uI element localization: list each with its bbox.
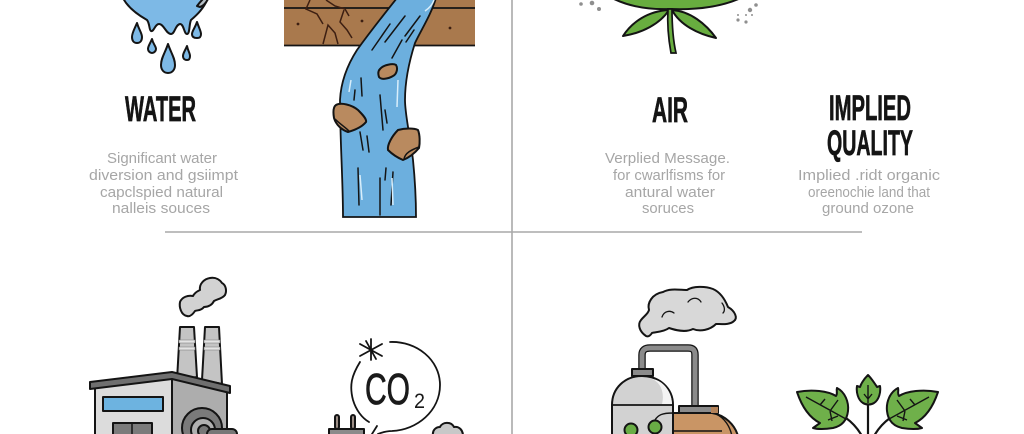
icon: factory with smoke	[90, 278, 237, 434]
text block: water description: capclspied natural	[100, 184, 223, 201]
text block: water description: diversion and gsiimpt	[89, 167, 239, 184]
text block: air description: for cwarlfisms for	[613, 167, 725, 184]
panel: air	[579, 0, 941, 217]
heading: water: WATER	[125, 90, 196, 129]
text block: water description	[89, 150, 239, 217]
icon: melting water globe	[123, 0, 208, 73]
panel: biogas and plants	[612, 287, 938, 434]
panel: water	[89, 0, 475, 217]
text block: air description	[605, 150, 730, 217]
text block: implied quality description: oreenochie land that	[808, 184, 931, 201]
heading: implied quality: IMPLIED	[829, 89, 911, 128]
icon: plug	[329, 415, 364, 434]
icon: green leaf with particles	[579, 0, 758, 53]
heading: implied quality: QUALITY	[827, 124, 913, 163]
icon: green plant	[797, 375, 938, 434]
text block: implied quality description: ground ozone	[822, 200, 914, 217]
icon: cloud of gas	[639, 287, 736, 336]
text block: air description: soruces	[642, 200, 694, 217]
icon: rocks in river	[333, 64, 420, 160]
heading: air: AIR	[652, 91, 688, 130]
text block: implied quality description: Implied .ridt organic	[798, 167, 941, 184]
heading: implied quality	[827, 89, 913, 163]
star mark	[360, 339, 382, 360]
chimneys	[177, 327, 222, 384]
text block: air description: antural water	[625, 184, 715, 201]
icon: river through cracked earth	[284, 0, 475, 217]
icon: digester tank and pipe	[612, 348, 738, 434]
panel: carbon emissions	[90, 278, 463, 434]
text block: water description: Significant water	[107, 150, 217, 167]
text block: water description: nalleis souces	[112, 200, 210, 217]
CO2 label: 2	[414, 390, 425, 413]
text block: air description: Verplied Message.	[605, 150, 730, 167]
icon: CO2 speech bubble	[351, 339, 440, 434]
CO2 label: CO	[365, 365, 410, 414]
smoke plume	[180, 278, 226, 316]
text block: implied quality description	[798, 167, 941, 217]
icon: small cloud	[433, 423, 463, 434]
